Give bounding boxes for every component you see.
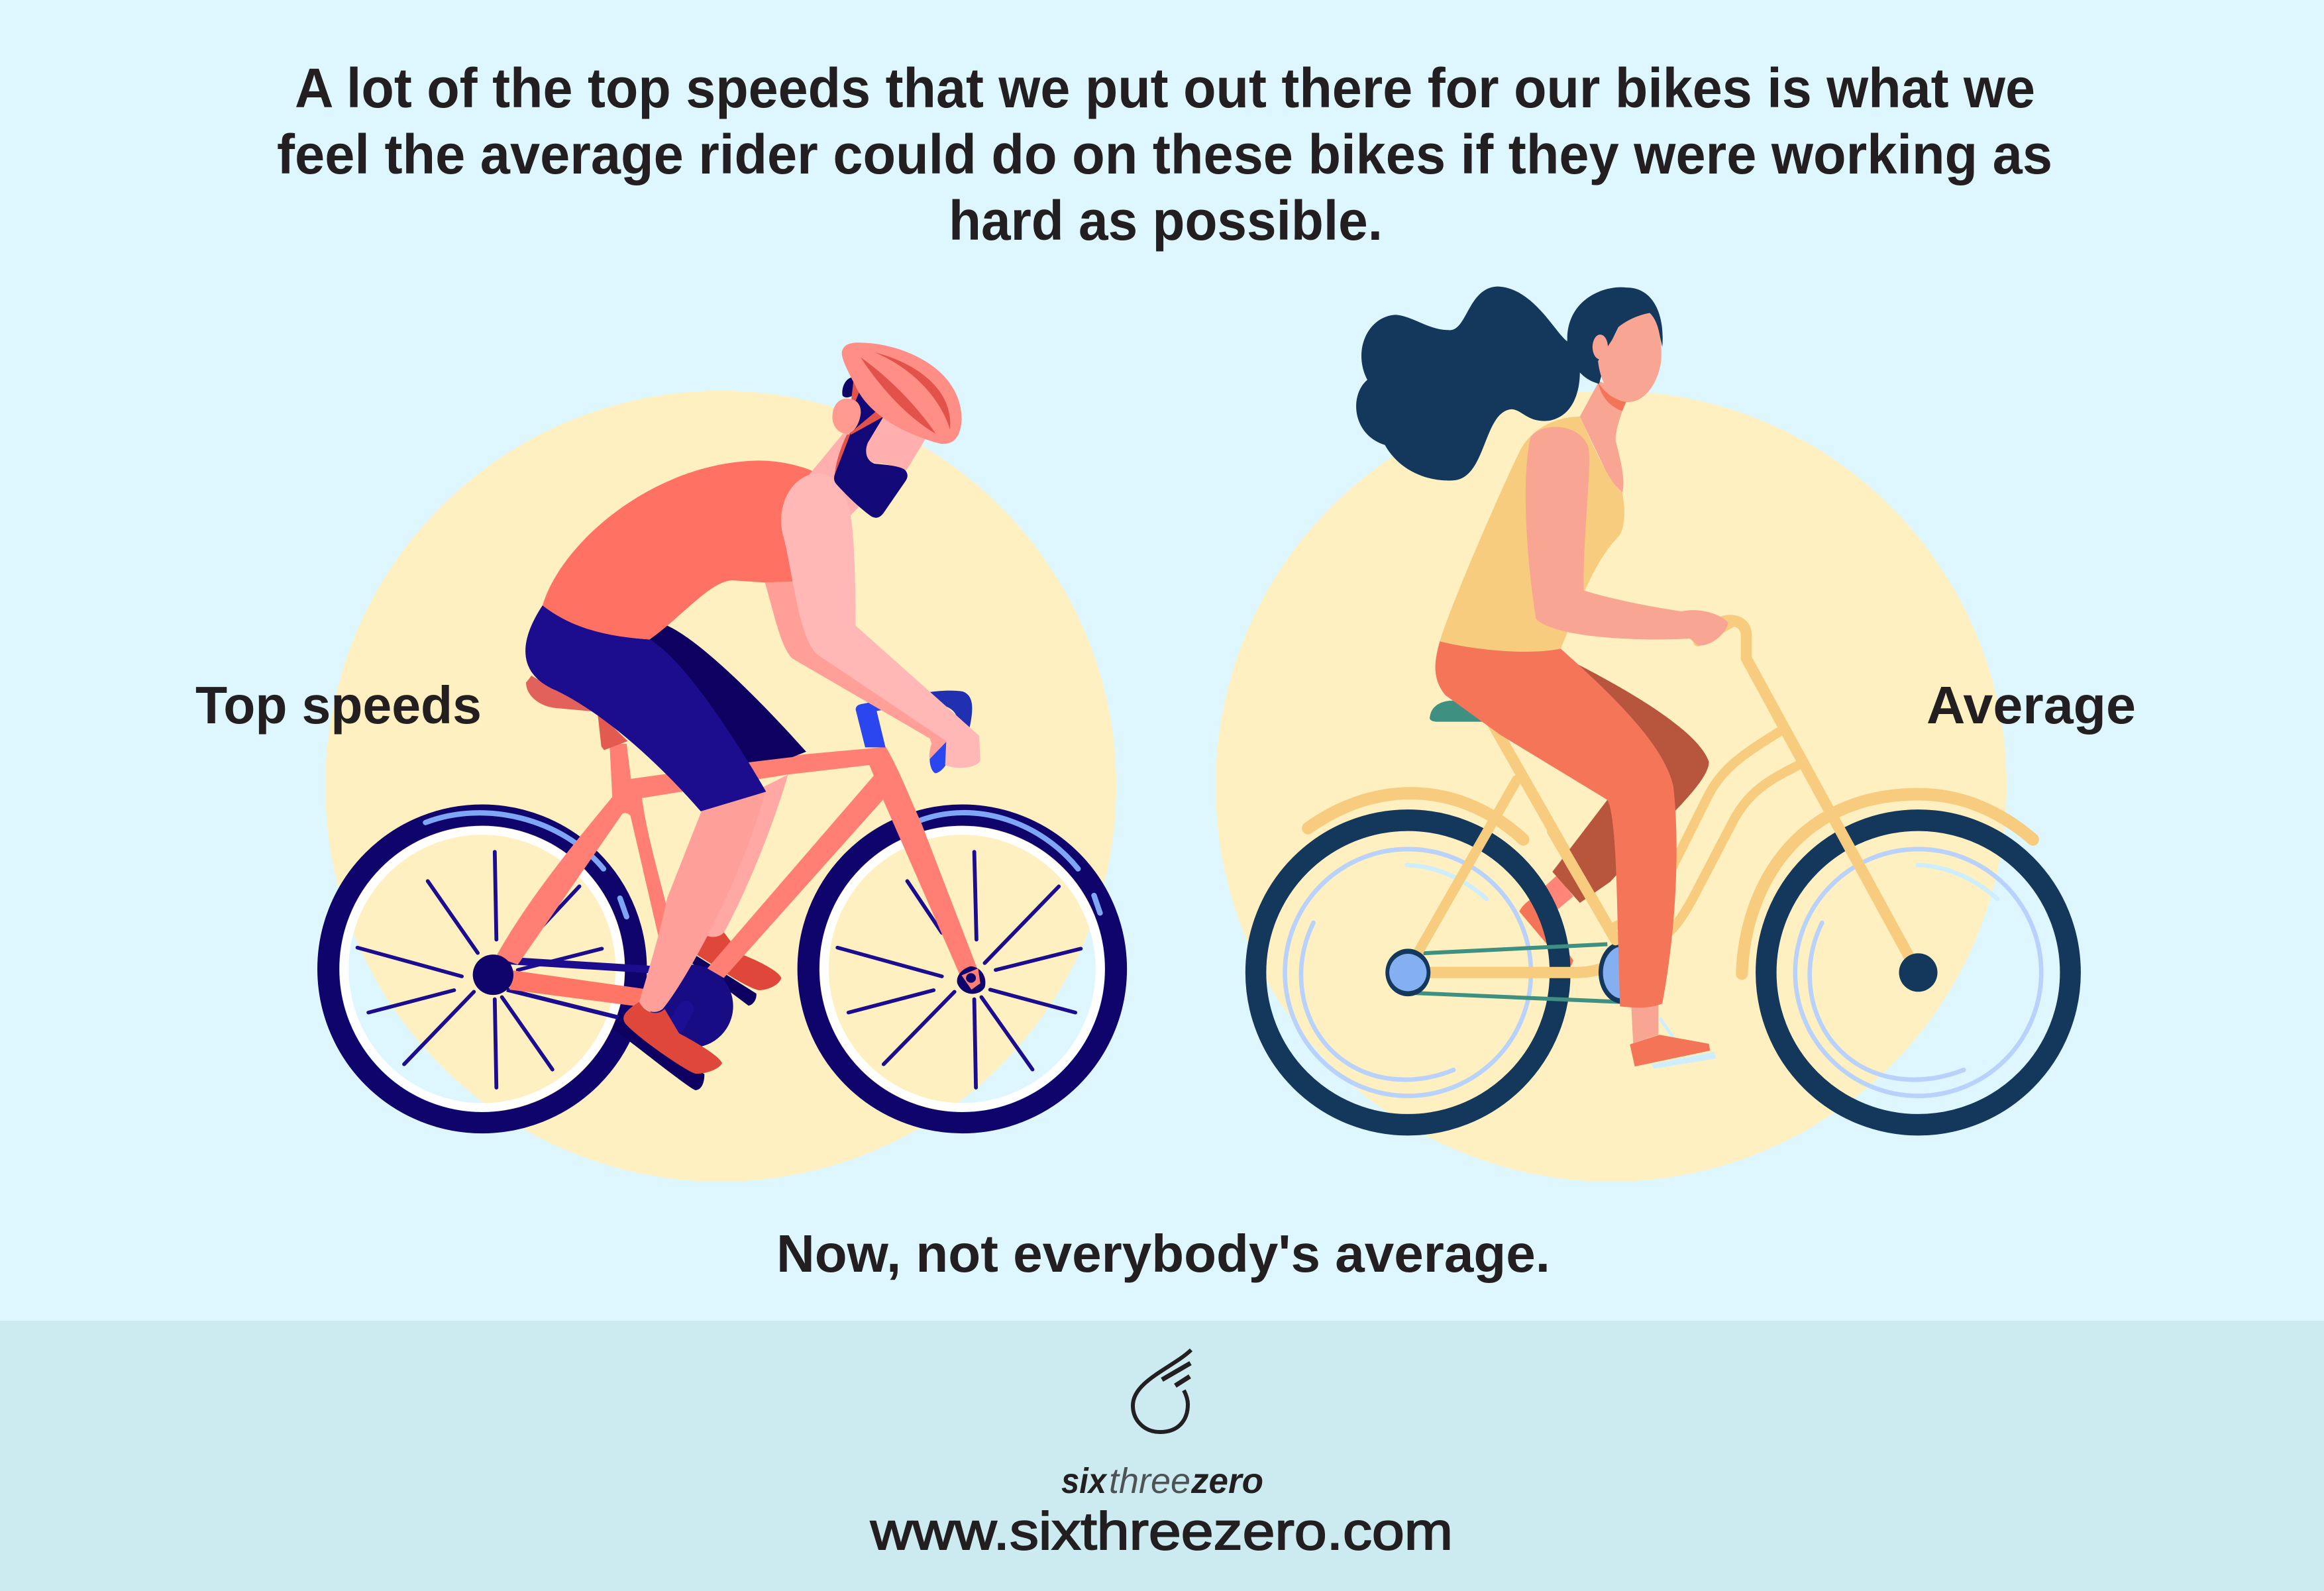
logo wordmark: three: [1109, 1461, 1190, 1501]
frame in front of back leg: [1552, 831, 1616, 940]
title: [277, 57, 2052, 252]
neck: [1580, 381, 1629, 493]
handlebar: [856, 691, 972, 747]
ear: [832, 399, 861, 434]
logo wordmark: six: [1061, 1461, 1108, 1501]
saddle: [1430, 701, 1487, 722]
back arm: [765, 582, 952, 760]
illustration: casual cyclist: [1256, 286, 2070, 1125]
back foot: [1519, 876, 1573, 966]
title: A lot of the top speeds that we put out there for our bikes is what we: [295, 57, 2035, 119]
title: feel the average rider could do on these bikes if they were working as: [277, 123, 2052, 185]
front arm: [781, 474, 980, 768]
caption: Now, not everybody's average.: [776, 1224, 1550, 1283]
helmet vents: [861, 352, 950, 434]
tank top: [1440, 417, 1624, 652]
neck: [809, 431, 864, 517]
website url: www.sixthreezero.com: [870, 1502, 1453, 1561]
helmet strap: [835, 381, 886, 475]
hubs: [1385, 941, 1938, 1003]
shorts: [525, 605, 806, 811]
beard: [834, 382, 908, 518]
head and helmet: [832, 342, 962, 518]
chain and chainring: [504, 960, 733, 1048]
torso: [543, 460, 849, 639]
chain: [1412, 945, 1621, 1002]
arm: [1526, 427, 1728, 646]
back leg: [1552, 664, 1709, 903]
city bike wheels: [1256, 820, 2070, 1125]
brake lever: [929, 740, 951, 773]
front leg: [639, 792, 765, 1012]
background circle: average: [1216, 391, 2007, 1182]
face: [1593, 313, 1662, 402]
logo icon: wing: [1133, 1350, 1191, 1432]
bike frame: [473, 744, 985, 1007]
bike frame: [1308, 621, 2033, 974]
face: [866, 415, 925, 470]
illustration: racing cyclist: [329, 342, 1116, 1123]
logo wordmark: zero: [1190, 1461, 1263, 1501]
footer band: [0, 1321, 2324, 1591]
label: top speeds: Top speeds: [195, 676, 482, 735]
front leg: [1436, 641, 1716, 1069]
title: hard as possible.: [949, 189, 1383, 252]
label: average: Average: [1927, 676, 2136, 735]
hair: [842, 377, 859, 397]
saddle: [526, 676, 627, 750]
flowing hair: [1356, 286, 1663, 481]
background circle: top speeds: [325, 391, 1116, 1182]
front crank and shoe: [613, 1002, 722, 1090]
road bike wheels: [329, 813, 1116, 1123]
back leg: [682, 774, 788, 937]
rear crank and shoe: [691, 931, 781, 1005]
helmet: [842, 342, 962, 444]
